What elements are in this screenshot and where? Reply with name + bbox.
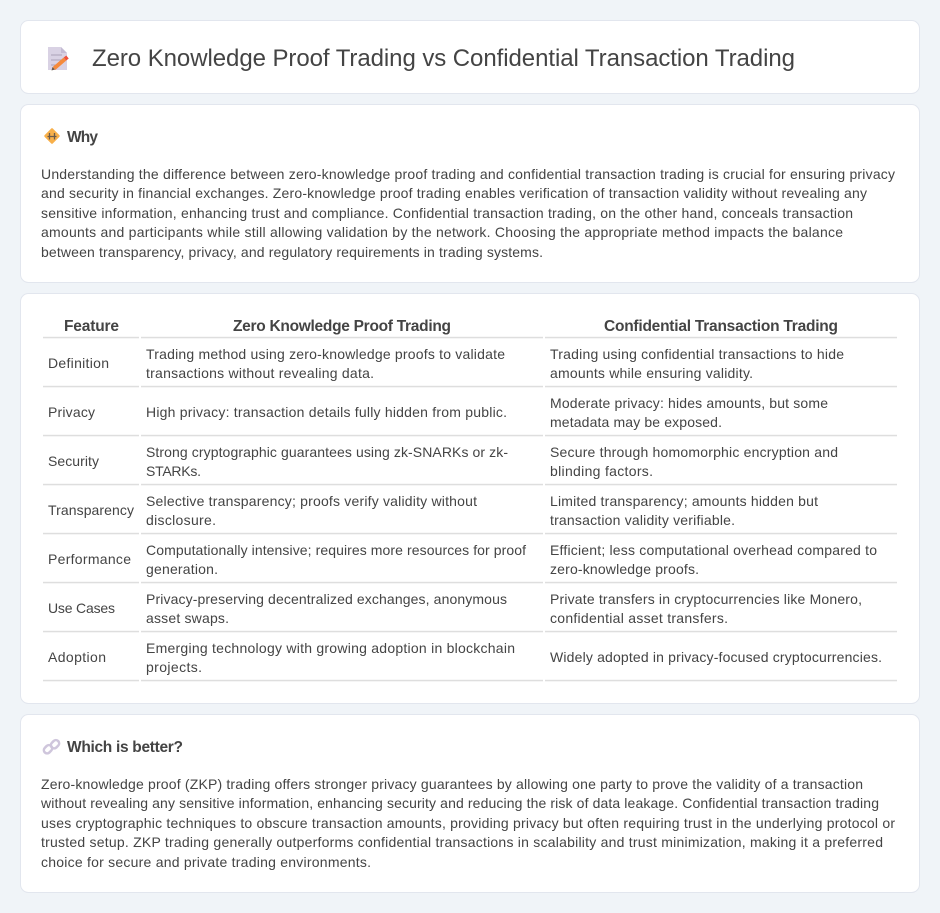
row: transparency: Limited transparency; amounts hidden but — [550, 493, 818, 509]
row: adoption — [48, 640, 882, 675]
table header: Zero Knowledge Proof Trading — [233, 318, 451, 335]
row: performance — [48, 542, 877, 577]
why text block: sensitive information, enhancing trust and compliance. Confidential transaction trading, on the other hand, conceals transaction — [41, 205, 853, 221]
icon: warning diamond — [46, 130, 58, 142]
row: use cases: confidential asset transfers. — [550, 610, 728, 626]
row: performance: Computationally intensive; requires more resources for proof — [146, 542, 526, 558]
table header: Feature — [64, 318, 119, 335]
row: transparency — [48, 493, 818, 528]
which is better text block: uses cryptographic techniques to obscure transaction amounts, providing privacy but often requiring trust in the underlying protocol or — [41, 815, 895, 831]
row: security: Secure through homomorphic encryption and — [550, 444, 838, 460]
which is better text block: without revealing any sensitive information, enhancing security and reducing the risk of data leakage. Confidential transaction trading — [40, 795, 879, 811]
row: definition: amounts while ensuring validity. — [550, 365, 753, 381]
why text block: between transparency, privacy, and regulatory requirements in trading systems. — [41, 244, 543, 260]
row: security — [48, 444, 838, 479]
row: transparency: Transparency — [48, 502, 134, 518]
row: performance: zero-knowledge proofs. — [550, 561, 699, 577]
row: use cases: Private transfers in cryptocurrencies like Monero, — [550, 591, 862, 607]
row: definition: Trading method using zero-knowledge proofs to validate — [146, 346, 505, 362]
row: definition — [48, 346, 844, 381]
heading: which is better: Which is better? — [67, 739, 183, 756]
panel: title — [20, 20, 920, 94]
why text block: and security in financial exchanges. Zero-knowledge proof trading enables verification of transaction validity without revealing any — [41, 185, 867, 201]
row: adoption: projects. — [146, 659, 202, 675]
row: definition: Definition — [48, 355, 109, 371]
row: transparency: disclosure. — [146, 512, 216, 528]
row: privacy — [48, 395, 828, 430]
row: privacy: metadata may be exposed. — [550, 414, 722, 430]
title text: Zero Knowledge Proof Trading vs Confidential Transaction Trading — [92, 45, 795, 72]
row: privacy: High privacy: transaction details fully hidden from public. — [146, 404, 507, 420]
panel: which is better — [20, 714, 920, 892]
row: use cases: Privacy-preserving decentralized exchanges, anonymous — [146, 591, 507, 607]
row: transparency: transaction validity verifiable. — [550, 512, 735, 528]
which is better text block: Zero-knowledge proof (ZKP) trading offers stronger privacy guarantees by allowing one party to prove the validity of a transaction — [41, 776, 863, 792]
which is better text block: choice for secure and private trading environments. — [41, 854, 371, 870]
row: performance: generation. — [146, 561, 218, 577]
which is better text block — [40, 776, 895, 870]
row: definition: Trading using confidential transactions to hide — [550, 346, 844, 362]
row: definition: transactions without revealing data. — [146, 365, 374, 381]
panel: why — [20, 104, 920, 282]
row: adoption: Emerging technology with growing adoption in blockchain — [146, 640, 515, 656]
icon: chain link — [43, 739, 60, 755]
row: use cases: Use Cases — [48, 600, 115, 616]
row: privacy: Privacy — [48, 404, 95, 420]
row: use cases — [48, 591, 862, 626]
row: adoption: Adoption — [48, 649, 106, 665]
icon: document with pencil — [48, 47, 68, 70]
why text block — [41, 166, 895, 260]
row: security: Security — [48, 453, 99, 469]
row: performance: Performance — [48, 551, 131, 567]
table header: Confidential Transaction Trading — [604, 318, 838, 335]
table header — [64, 318, 838, 335]
row: performance: Efficient; less computational overhead compared to — [550, 542, 877, 558]
row: privacy: Moderate privacy: hides amounts, but some — [550, 395, 828, 411]
row: transparency: Selective transparency; proofs verify validity without — [146, 493, 477, 509]
row: security: Strong cryptographic guarantees using zk-SNARKs or zk- — [146, 444, 508, 460]
heading: why: Why — [67, 129, 98, 146]
why text block: Understanding the difference between zero-knowledge proof trading and confidential transaction trading is crucial for ensuring privacy — [41, 166, 895, 182]
row: adoption: Widely adopted in privacy-focused cryptocurrencies. — [550, 649, 882, 665]
panel: comparison table — [20, 294, 920, 704]
which is better text block: trusted setup. ZKP trading generally outperforms confidential transactions in scalability and trust minimization, making it a preferred — [41, 834, 883, 850]
row: security: STARKs. — [146, 463, 201, 479]
row: security: blinding factors. — [550, 463, 653, 479]
why text block: amounts and participants while still allowing validation by the network. Choosing the appropriate method impacts the balance — [41, 224, 843, 240]
row: use cases: asset swaps. — [146, 610, 229, 626]
